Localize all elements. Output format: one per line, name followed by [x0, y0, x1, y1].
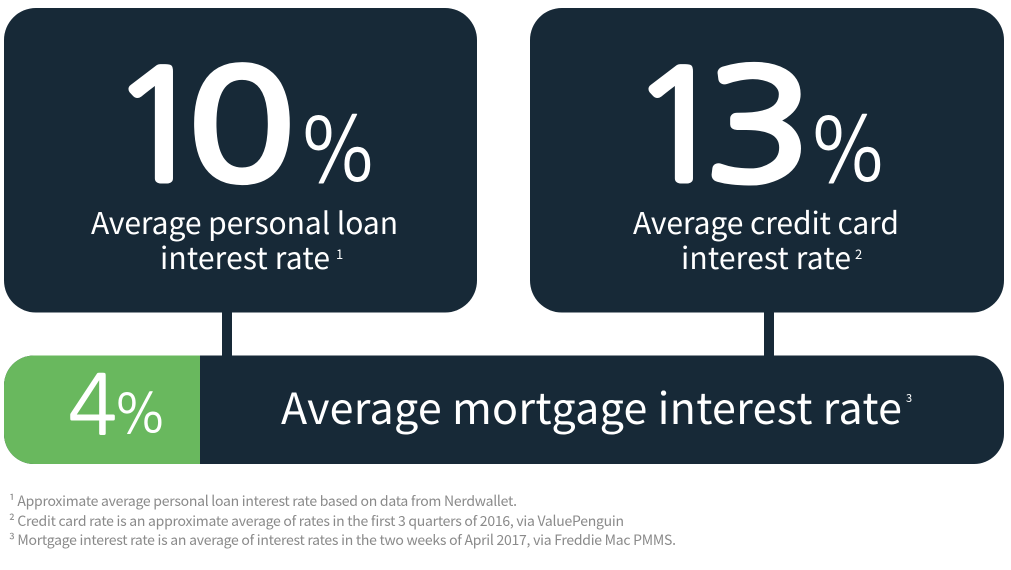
- big number: 10: 0: [188, 50, 295, 202]
- big number: 13: [628, 50, 812, 203]
- big number: 10: [108, 50, 295, 203]
- footnote 3: ³ Mortgage interest rate is an average of interest rates in the two weeks of April 2017, via Freddie Mac PMMS.: [9, 530, 676, 550]
- footnotes: [9, 491, 676, 550]
- footnote marker 1: 1: [336, 244, 343, 263]
- footnote 2: ² Credit card rate is an approximate average of rates in the first 3 quarters of 2016, via ValuePenguin: [9, 511, 624, 531]
- green rate block: [4, 356, 200, 464]
- footnote 1: ¹ Approximate average personal loan interest rate based on data from Nerdwallet.: [9, 491, 517, 511]
- percent sign: %: [806, 107, 890, 195]
- number: 4: 4: [68, 364, 117, 446]
- percent sign: %: [112, 387, 168, 441]
- big number: 10: 1: [108, 51, 209, 203]
- mortgage bar background: [4, 356, 1004, 464]
- label: credit card: Average credit card: [633, 199, 899, 243]
- connector: credit card to mortgage: [764, 305, 774, 365]
- label: interest rate: interest rate: [681, 234, 851, 278]
- big number: 13: 1: [628, 51, 729, 203]
- panel: personal loan rate: [4, 8, 477, 312]
- panel: credit card rate: [530, 8, 1004, 312]
- percent sign: %: [296, 107, 380, 195]
- big number: 13: 3: [705, 50, 812, 202]
- panel: mortgage rate: [4, 356, 1004, 464]
- label: interest rate: interest rate: [160, 234, 330, 278]
- connector: personal loan to mortgage: [222, 305, 232, 365]
- label: personal loan: Average personal loan: [91, 199, 398, 243]
- footnote marker 2: 2: [855, 244, 862, 263]
- footnote marker 3: 3: [906, 390, 912, 406]
- label: mortgage: Average mortgage interest rate: [281, 375, 902, 437]
